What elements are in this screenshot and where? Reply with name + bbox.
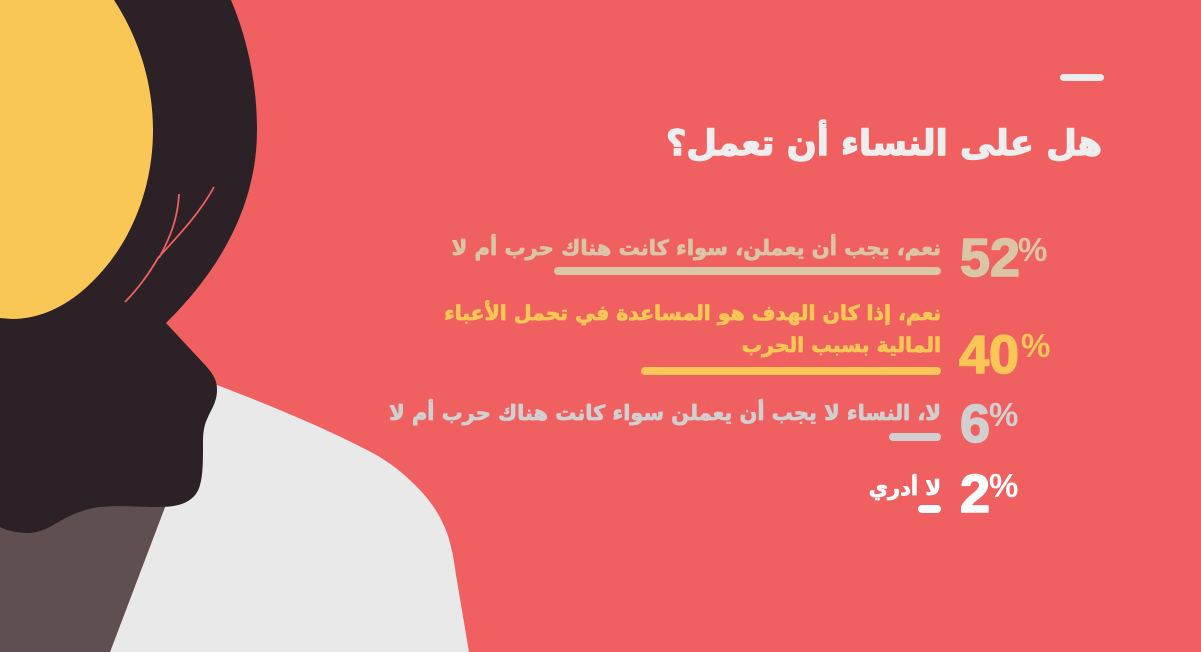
bar 2: [918, 505, 941, 513]
row: 52%: [452, 228, 1047, 288]
title: هل على النساء أن تعمل؟: [666, 120, 1102, 164]
label 52: نعم، يجب أن يعملن، سواء كانت هناك حرب أم لا: [452, 233, 941, 260]
label 40: نعم، إذا كان الهدف هو المساعدة في تحمل الأعباء: [444, 299, 941, 325]
percent 6: %: [989, 396, 1018, 433]
shirt: [110, 385, 469, 652]
row: 2%: [869, 464, 1018, 524]
neck: [0, 490, 172, 652]
face: [0, 0, 153, 319]
label 40 second line: المالية بسبب الحرب: [742, 333, 941, 357]
illustration: woman in profile: [0, 0, 469, 652]
bar 52: [554, 267, 941, 275]
value 52: 52: [960, 228, 1020, 288]
bar 40: [641, 367, 941, 375]
hair strands: [125, 187, 214, 302]
top accent rule: [1060, 74, 1104, 81]
value 6: 6: [960, 394, 990, 454]
percent 52: %: [1018, 231, 1047, 268]
row: 40%: [444, 299, 1050, 385]
label 2: لا أدري: [869, 473, 941, 501]
percent 2: %: [989, 467, 1018, 504]
value 2: 2: [960, 464, 990, 524]
percent 40: %: [1021, 327, 1050, 364]
value 40: 40: [959, 325, 1019, 385]
headscarf: [0, 0, 257, 533]
row: 6%: [389, 394, 1018, 454]
label 6: لا، النساء لا يجب أن يعملن سواء كانت هناك حرب أم لا: [389, 398, 941, 425]
bar 6: [889, 433, 941, 441]
